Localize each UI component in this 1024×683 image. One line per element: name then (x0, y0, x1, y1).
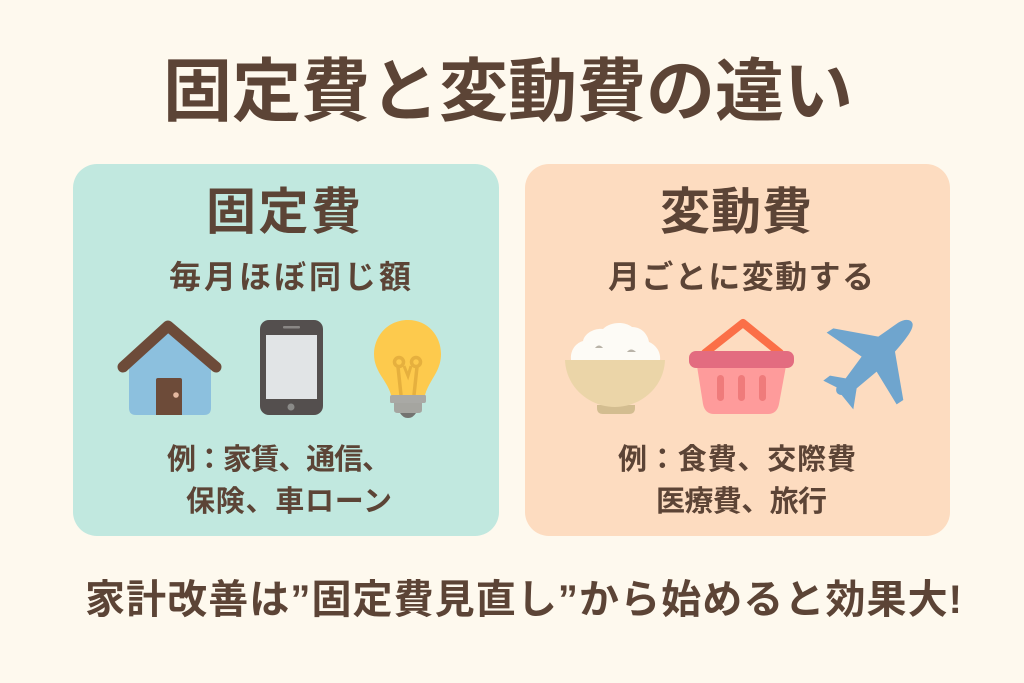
icon: house (123, 326, 216, 415)
example text: variable costs (618, 443, 856, 518)
icon: rice bowl (565, 323, 665, 414)
panel heading: fixed costs: 固定費 (206, 184, 361, 240)
example text: fixed costs: 例：家賃、通信、 (167, 443, 391, 476)
panel heading: variable costs: 変動費 (660, 184, 812, 240)
panel subheading: fixed costs: 毎月ほぼ同じ額 (169, 259, 411, 295)
panel: variable costs (525, 164, 950, 536)
panel: fixed costs (73, 164, 499, 536)
example text: fixed costs (167, 443, 392, 518)
example text: fixed costs: 保険、車ローン (186, 485, 392, 518)
example text: variable costs: 医療費、旅行 (656, 485, 827, 518)
icon: shopping basket (689, 323, 794, 414)
panel subheading: variable costs: 月ごとに変動する (608, 259, 874, 295)
example text: variable costs: 例：食費、交際費 (618, 443, 856, 476)
icon: airplane (823, 320, 913, 409)
icon: smartphone (260, 320, 323, 415)
icon: light bulb (374, 320, 441, 418)
footer message: 家計改善は”固定費見直し”から始めると効果大! (85, 578, 962, 622)
title: 固定費と変動費の違い (163, 53, 853, 130)
